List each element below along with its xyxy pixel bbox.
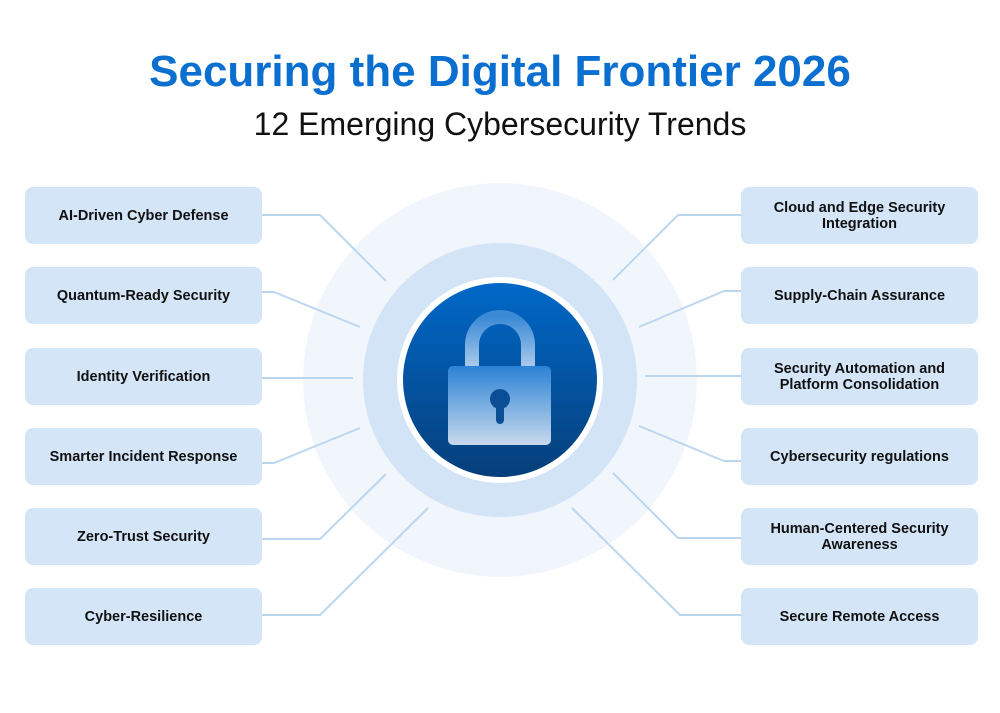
text: Cyber-Resilience [85,608,202,624]
left boxes: AI-Driven Cyber Defense [58,208,229,224]
icon: padlock [448,317,551,445]
text: Zero-Trust Security [77,528,210,544]
left boxes [25,187,262,244]
right boxes [741,187,978,244]
text: Identity Verification [77,368,210,384]
right boxes: Cloud and Edge Security [774,200,945,216]
text: Quantum-Ready Security [57,288,230,304]
text: Secure Remote Access [780,608,939,624]
text: Smarter Incident Response [50,448,237,464]
subtitle: 12 Emerging Cybersecurity Trends [254,106,746,142]
text: Awareness [821,536,898,552]
text: Platform Consolidation [780,376,939,392]
text: Security Automation and [774,360,945,376]
text: Cybersecurity regulations [770,448,949,464]
text: Supply-Chain Assurance [774,288,945,304]
text: Human-Centered Security [770,520,949,536]
title: Securing the Digital Frontier 2026 [149,47,851,96]
right boxes: Integration [822,216,897,232]
